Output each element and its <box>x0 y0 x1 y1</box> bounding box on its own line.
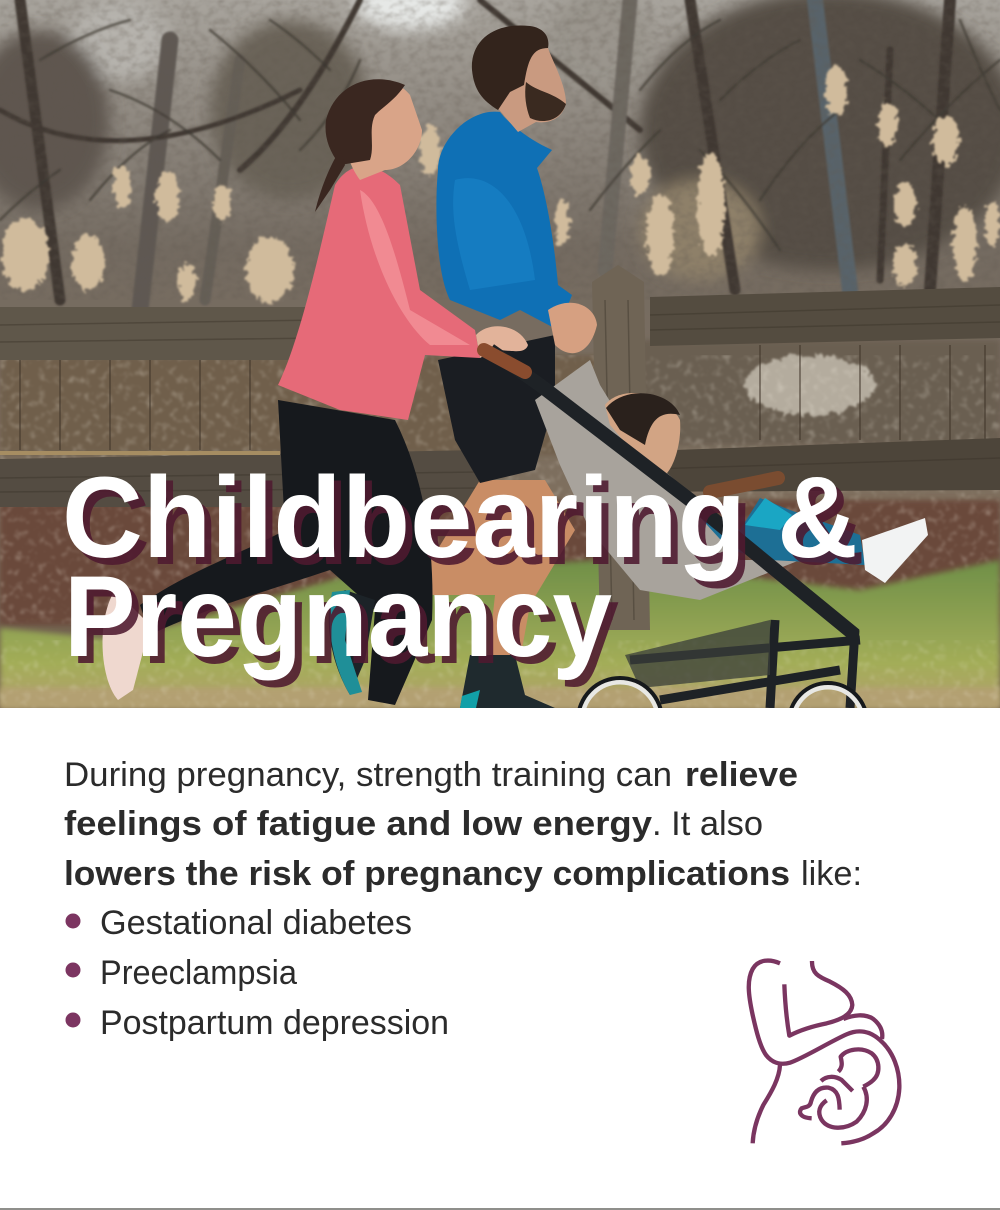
bullet list of complications <box>66 904 449 1042</box>
bottom edge strip <box>0 1208 1000 1210</box>
wooden fence <box>0 265 1000 630</box>
intro paragraph: like: <box>801 855 862 893</box>
background reeds behind fence <box>0 340 1000 625</box>
stroller <box>477 343 928 708</box>
woman <box>103 79 528 705</box>
man head <box>495 48 566 132</box>
title text: Pregnancy <box>64 553 612 681</box>
title shadow <box>69 461 865 688</box>
intro paragraph <box>64 756 862 893</box>
man <box>425 25 597 708</box>
intro paragraph: . It also <box>652 805 763 843</box>
intro paragraph: feelings of fatigue and low energy <box>64 805 652 843</box>
title text: Childbearing & <box>62 454 858 582</box>
man hoodie <box>436 112 572 330</box>
icon: pregnant torso with fetus <box>749 961 899 1143</box>
title <box>62 454 865 688</box>
woman top <box>278 166 480 420</box>
woman hand <box>476 326 528 358</box>
woman head <box>350 88 422 180</box>
grass <box>0 560 1000 708</box>
man shorts <box>438 335 555 483</box>
seat fabric <box>535 360 800 600</box>
woman leggings <box>140 400 433 705</box>
woman shoe <box>102 593 143 700</box>
child shoes <box>862 518 928 583</box>
man legs <box>425 480 575 660</box>
child <box>605 393 680 478</box>
bullet: postpartum depression: Postpartum depression <box>100 1004 449 1042</box>
background trees and sky <box>0 0 1000 708</box>
bullet: gestational diabetes: Gestational diabetes <box>100 904 412 942</box>
intro paragraph: relieve <box>685 756 798 794</box>
man hands <box>548 303 597 353</box>
title text <box>62 454 858 681</box>
bullet: preeclampsia: Preeclampsia <box>100 954 297 992</box>
title shadow: Pregnancy <box>71 560 619 688</box>
intro paragraph: During pregnancy, strength training can <box>64 756 672 794</box>
handlebar and frame <box>490 350 855 635</box>
photo: family walking with stroller <box>0 0 1000 762</box>
reeds <box>1 64 999 303</box>
title shadow: Childbearing & <box>69 461 865 589</box>
intro paragraph: lowers the risk of pregnancy complications <box>64 855 790 893</box>
